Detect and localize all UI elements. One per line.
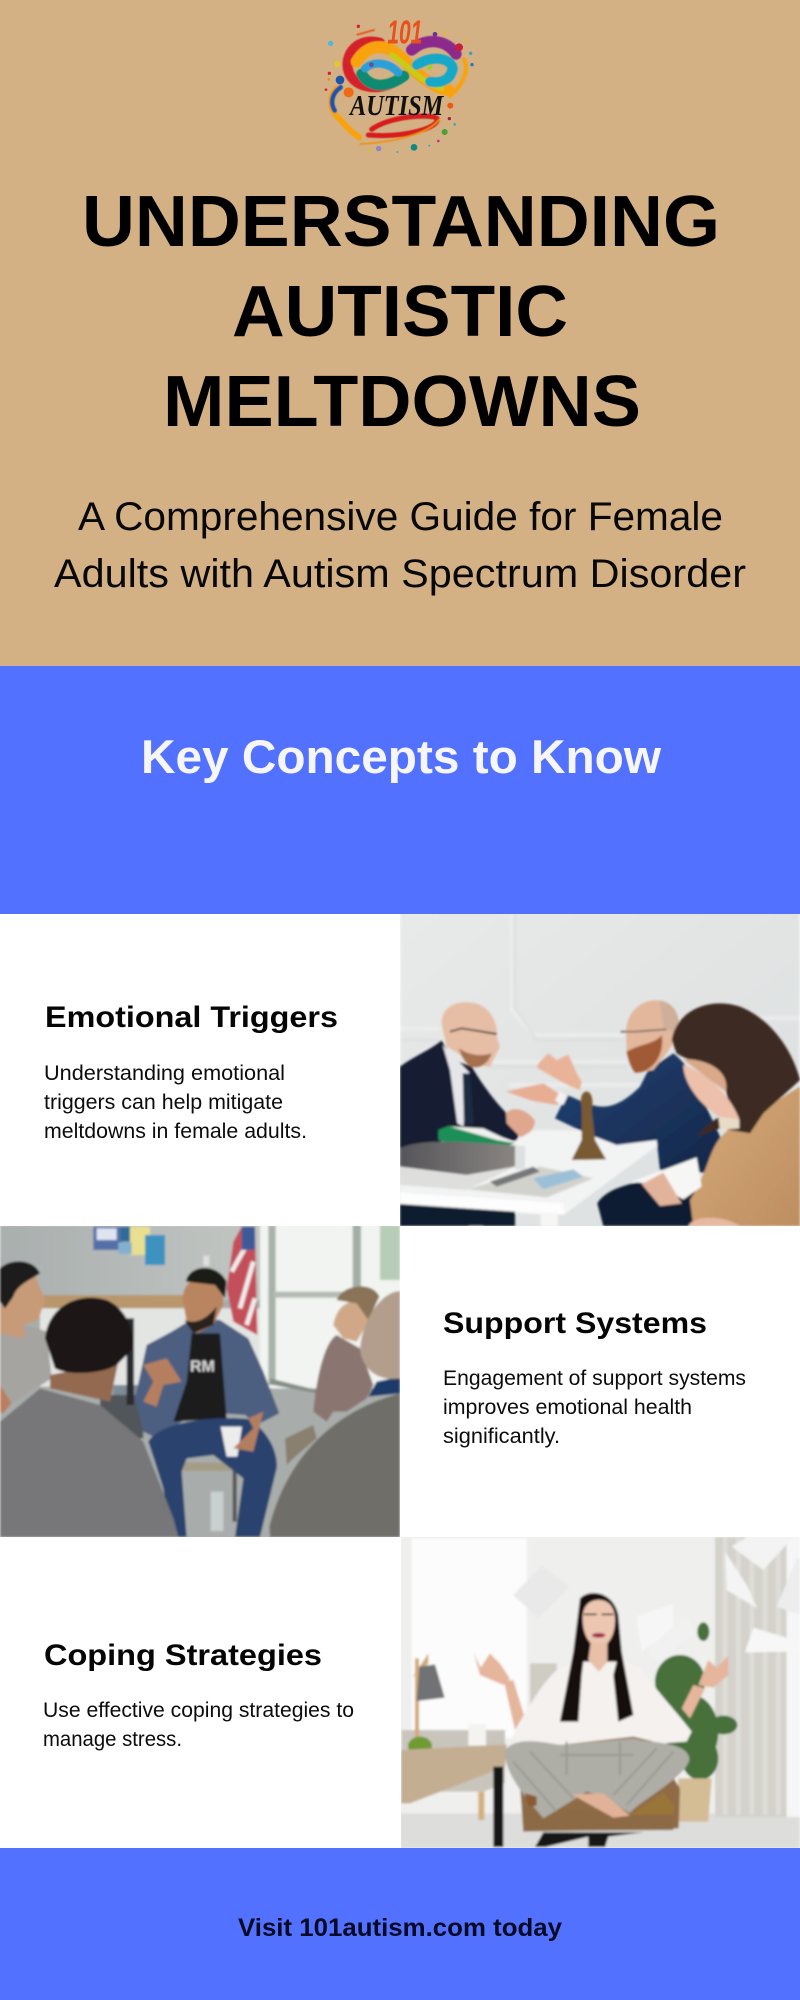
text block: subtitle: Adults with Autism Spectrum Disorder <box>54 552 746 596</box>
icon: 101 Autism logo: 101 <box>387 14 422 51</box>
binder <box>400 1142 518 1175</box>
chair seat <box>183 1462 233 1471</box>
heading: Coping Strategies: Coping Strategies <box>44 1639 322 1672</box>
icon: 101 Autism logo <box>324 14 474 153</box>
text block: support systems description: significantly. <box>443 1425 560 1448</box>
hair and face <box>560 1593 633 1722</box>
photo: support group discussion <box>0 1226 400 1537</box>
arms <box>504 1680 524 1730</box>
heading: main title <box>82 182 720 442</box>
newspaper <box>468 1167 593 1197</box>
panel: footer banner <box>0 1848 800 2000</box>
panel: key concepts banner <box>0 666 800 914</box>
statue <box>572 1091 606 1160</box>
front right man <box>269 1393 400 1537</box>
woman <box>690 1087 800 1226</box>
text block: coping strategies description <box>43 1699 354 1751</box>
photo: distressed woman with two men at a table <box>400 914 800 1226</box>
text block: emotional triggers description: triggers can help mitigate <box>44 1091 283 1114</box>
photo: woman meditating on an office chair <box>401 1537 800 1848</box>
text block: support systems description: Engagement of support systems <box>443 1367 746 1390</box>
text block: subtitle: A Comprehensive Guide for Female <box>78 495 723 539</box>
green folder <box>438 1126 515 1153</box>
heading: main title: MELTDOWNS <box>163 362 641 442</box>
heading: main title: UNDERSTANDING <box>82 182 720 262</box>
text block: coping strategies description: Use effective coping strategies to <box>43 1699 354 1722</box>
text block: call to action: Visit 101autism.com today <box>238 1914 562 1942</box>
panel: emotional triggers text <box>0 914 400 1226</box>
panel: title header <box>0 0 800 666</box>
right man <box>555 1053 722 1173</box>
shirt <box>512 1653 692 1745</box>
text block: emotional triggers description <box>44 1062 307 1143</box>
desk <box>401 1744 507 1803</box>
pants <box>505 1738 689 1818</box>
mug, apple <box>468 1724 486 1746</box>
right man <box>313 1335 373 1422</box>
plant <box>655 1622 737 1780</box>
centre man <box>135 1318 279 1438</box>
text block: emotional triggers description: meltdowns in female adults. <box>44 1120 307 1143</box>
panel: coping strategies text <box>0 1537 401 1848</box>
photo: support group discussion: RM <box>190 1359 215 1376</box>
left seated man <box>0 1324 52 1412</box>
text block: subtitle <box>54 495 746 596</box>
text block: support systems description <box>443 1367 746 1448</box>
heading: Emotional Triggers: Emotional Triggers <box>45 1001 338 1034</box>
text block: coping strategies description: manage stress. <box>43 1728 182 1751</box>
table <box>400 1130 658 1215</box>
left man <box>400 1041 519 1148</box>
panel: support systems text <box>400 1226 800 1537</box>
text block: support systems description: improves emotional health <box>443 1396 692 1419</box>
heading: Key Concepts to Know: Key Concepts to Know <box>141 730 661 783</box>
jeans <box>148 1418 277 1537</box>
heading: Support Systems: Support Systems <box>443 1307 707 1340</box>
hands <box>537 1053 582 1090</box>
desk lamp <box>415 1658 419 1738</box>
front left man <box>0 1388 178 1537</box>
text block: emotional triggers description: Understanding emotional <box>44 1062 285 1085</box>
chair <box>520 1722 680 1832</box>
icon: 101 Autism logo: AUTISM <box>348 91 444 122</box>
papers <box>513 1566 570 1618</box>
heading: main title: AUTISTIC <box>232 272 568 352</box>
